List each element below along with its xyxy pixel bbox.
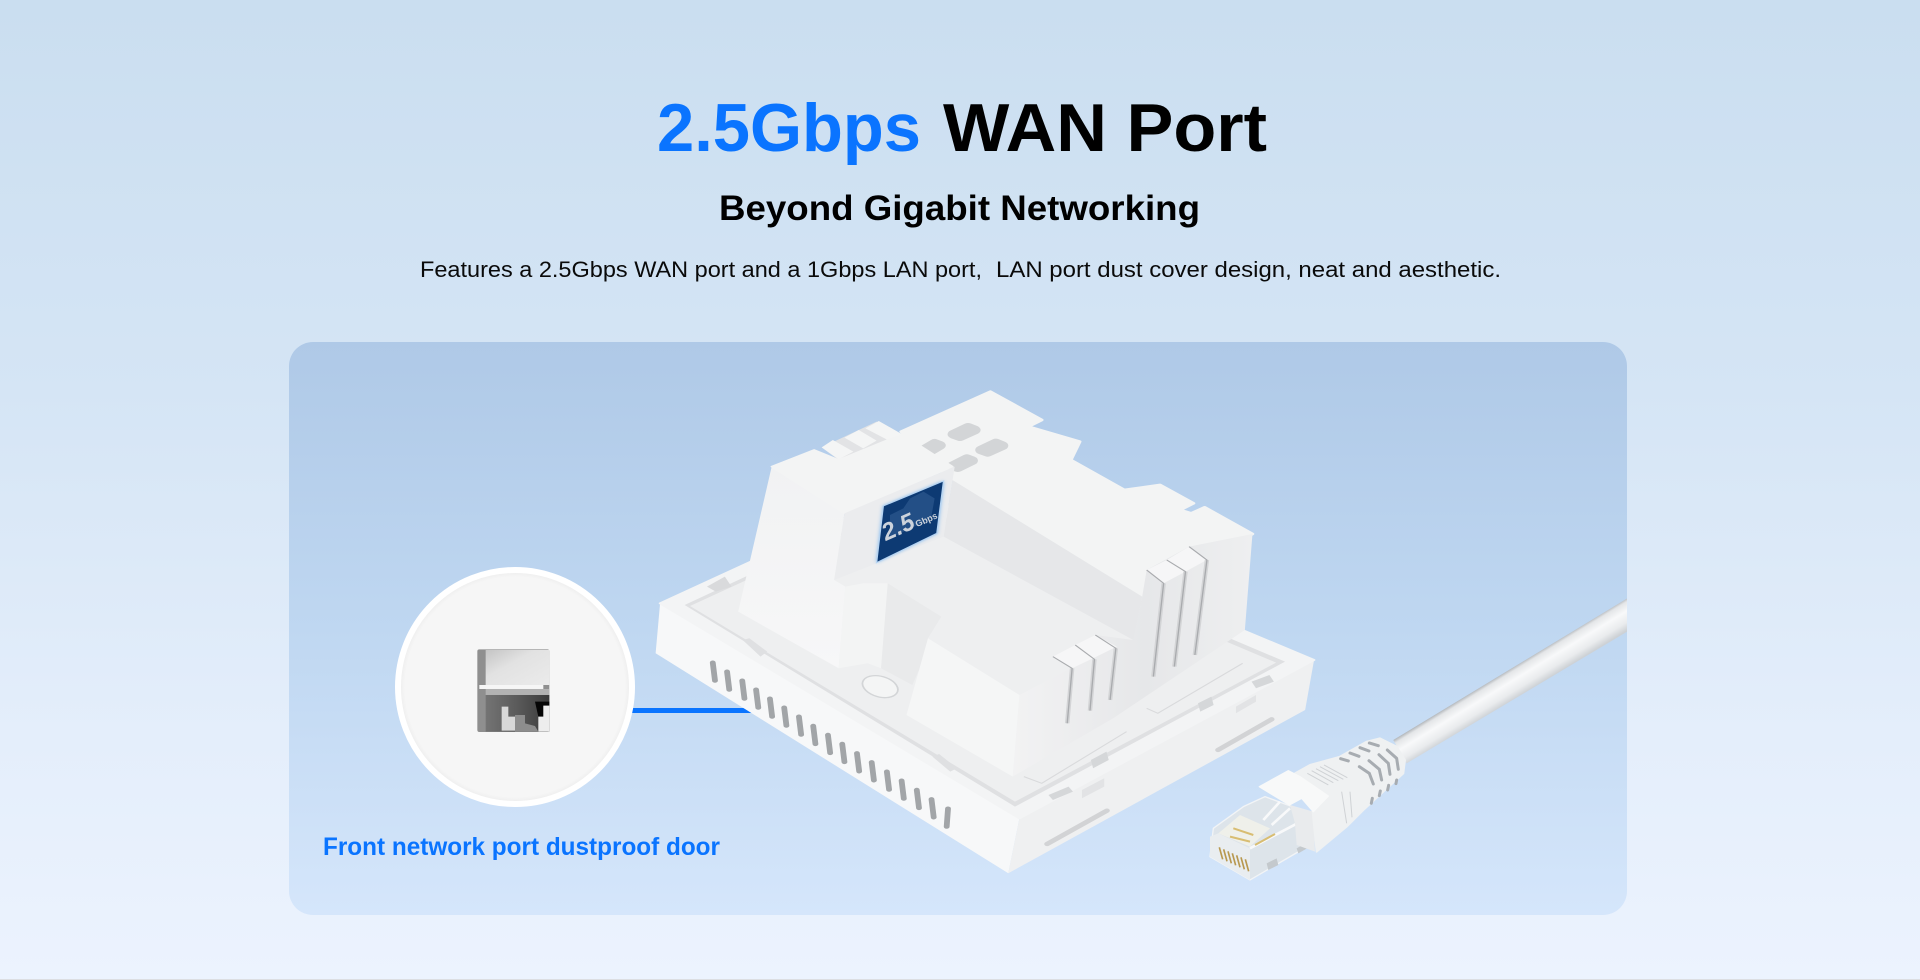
dust door [486,650,549,685]
panel: product stage [289,342,1627,915]
latch [1259,771,1328,812]
gold traces [1230,828,1275,845]
description: LAN port dust cover design, neat and aesthetic. [996,257,1501,282]
side slots [1047,719,1272,844]
port badge text: Gbps [914,511,939,529]
network cable [1210,587,1647,880]
connector line [630,708,755,713]
left tower left face [738,467,845,668]
vent slots [713,663,948,827]
plug front shadow [1210,833,1250,880]
door ledge [479,685,543,689]
base right side [1008,660,1314,873]
right contacts [538,706,549,732]
clear plug body [1209,796,1300,880]
boot [1295,738,1405,852]
floor [836,537,1133,695]
subtitle: Beyond Gigabit Networking [719,189,1200,228]
base clips [707,577,1274,800]
base top face [660,490,1314,818]
port badge text [877,499,941,547]
stub inner face [881,583,941,685]
inner wall [944,480,1142,642]
connector block [1290,805,1315,852]
base inner plate [690,507,1276,802]
tower fin backing [822,422,903,460]
cavity floor [515,715,538,732]
callout caption: Front network port dustproof door [323,833,720,861]
groove dark cores [1053,547,1207,723]
black opening [535,702,549,717]
fin and groove shadows [1067,560,1207,723]
rear block top face [901,392,1252,600]
mounting holes [926,427,1002,468]
device: wall-mounted access point, rear view [656,392,1314,873]
description: Features a 2.5Gbps WAN port and a 1Gbps LAN port, [420,257,982,282]
boot grille [1307,765,1352,823]
blue port [877,481,944,563]
left tower top face [772,435,952,513]
port cavity [486,695,549,732]
base left side [656,603,1019,873]
port housing [477,649,549,732]
blue port glow [877,481,944,563]
title: WAN Port [943,90,1267,166]
port badge text: 2.5 [877,508,920,547]
title: 2.5Gbps [657,90,921,166]
fin caps [1053,547,1208,668]
left contacts [502,707,515,731]
lower block left face [907,638,1019,777]
screw hole [857,671,903,702]
ledge shadow [486,689,549,695]
left tower front face [834,467,955,580]
lower stub [839,583,888,668]
RJ45 plug [1210,738,1405,880]
port detail [477,649,549,732]
port silhouette [890,492,935,538]
plug rear details [1266,846,1306,870]
plug top strips [1250,801,1296,850]
title [657,90,1267,166]
plug inner [1218,815,1270,847]
zoom callout disc [398,570,632,804]
disc [398,570,632,804]
description [420,257,1501,282]
gold contacts [1219,847,1249,871]
boot ribs [1341,743,1398,803]
base recess [685,502,1285,807]
right block side [1013,534,1252,777]
left tower top fins [822,421,903,459]
panel seam lines [1024,663,1243,783]
cable [1394,598,1627,764]
